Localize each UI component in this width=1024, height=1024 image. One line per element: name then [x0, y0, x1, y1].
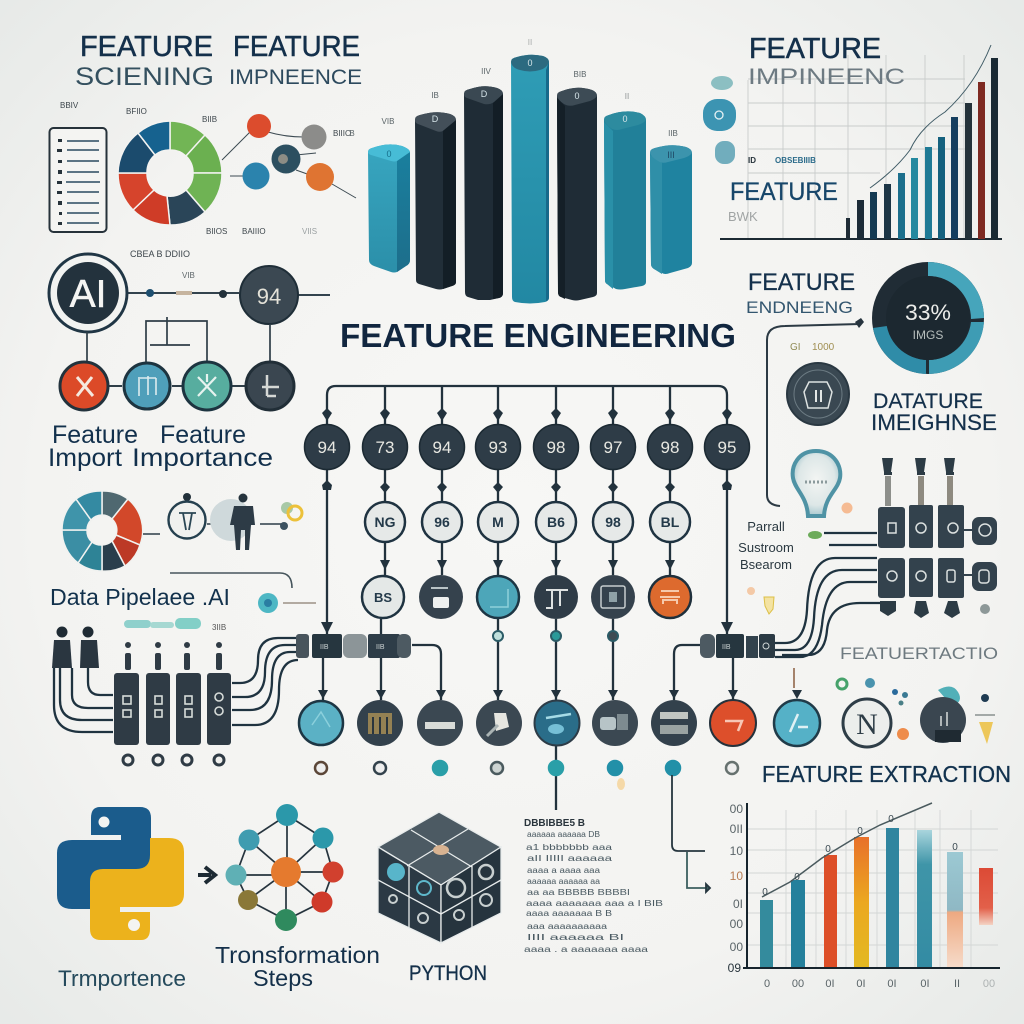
icon: checklist — [50, 128, 106, 232]
heading: top right: BWK — [728, 209, 758, 224]
small chart captions: top left: BFIIO — [126, 107, 147, 116]
label: feature importance: Importance — [132, 444, 273, 472]
bar chart: feature extraction: 10 — [730, 844, 743, 858]
flow tree: bottom row icon nodes — [299, 700, 820, 746]
flow tree: first row number nodes: 98 — [547, 438, 565, 457]
bar 3 — [464, 86, 503, 300]
flow tree: second row nodes: 98 — [605, 514, 621, 530]
label: parallel system: Sustroom — [738, 540, 794, 555]
label: datature imeighnse: IMEIGHNSE — [871, 410, 997, 435]
bar value labels: B — [349, 129, 355, 138]
text block: code listing: aaa aaaaaaaaaa — [527, 922, 608, 931]
heading: top right: OBSEBIIIB — [775, 156, 816, 165]
flow tree: arrow markers — [318, 408, 802, 699]
label: feature engineering right: ENDNEENG — [746, 298, 853, 317]
flow tree: third row icon nodes: BS — [374, 590, 392, 605]
3D bar chart: central — [349, 38, 692, 304]
label: feature importance: Feature — [52, 421, 138, 449]
heading: top left: IMPNEENCE — [229, 66, 362, 89]
text block: code listing: a1 bbbbbbb aaa — [526, 843, 613, 852]
flow tree: second row nodes: NG — [374, 514, 396, 530]
gauge: percentage: IMGS — [913, 328, 943, 342]
AI node group: left: 94 — [257, 284, 281, 309]
text block: code listing: DBBIBBE5 B — [524, 818, 585, 829]
bar chart: feature extraction: 0I — [920, 978, 930, 990]
flow tree: second row nodes: 96 — [434, 514, 450, 530]
connector: left — [296, 634, 411, 658]
connector line to bulb: GI — [790, 342, 801, 353]
flow tree: first row number nodes: 95 — [718, 438, 736, 457]
gauge: percentage — [872, 262, 984, 374]
icons: feature extraction: N — [856, 708, 878, 741]
bar chart: feature extraction: 00 — [730, 940, 743, 954]
heading: top right: IMPINEENC — [748, 64, 905, 89]
bar chart: feature extraction: 0 — [952, 842, 958, 853]
gauge: percentage: 33% — [905, 300, 951, 325]
donut chart: pipeline — [62, 491, 143, 571]
bar 6 — [604, 111, 646, 290]
python logo — [57, 807, 184, 940]
small chart captions: top left: BAIIIO — [242, 227, 266, 236]
bar chart: feature extraction: 0 — [857, 826, 863, 837]
flow tree: bottom small markers — [315, 761, 738, 775]
bar 4 — [511, 55, 549, 303]
bar chart: feature extraction: 09 — [728, 961, 741, 975]
connector: left: IIB — [376, 644, 385, 651]
flow tree: bus lines — [323, 386, 733, 810]
text block: code listing: aII IIIII aaaaaa — [527, 854, 613, 863]
bar chart: feature extraction: 0I — [856, 978, 866, 990]
connector line to bulb — [767, 318, 864, 506]
text block: code listing: aaaa aaaaaaa B B — [526, 909, 612, 918]
label: transformation steps — [215, 942, 380, 991]
AI node group: left — [49, 249, 330, 410]
bar cap glyphs: 0 — [622, 114, 628, 124]
heading: top left: FEATURE — [80, 31, 213, 63]
label: python: PYTHON — [409, 962, 487, 985]
AI node group: left: AI — [70, 273, 106, 316]
bar chart: feature extraction: 0I — [825, 978, 835, 990]
bar cap glyphs: 0 — [386, 149, 392, 159]
flow tree: second row nodes: B6 — [547, 514, 565, 530]
label: transformation steps: Steps — [253, 965, 313, 991]
bar 5 — [557, 88, 597, 301]
label: feature importance — [48, 421, 273, 472]
label: data pipeline: Data Pipelaee .AI — [50, 584, 230, 610]
arrow — [198, 867, 215, 883]
bar chart: feature extraction: 10 — [730, 869, 743, 883]
heading: top right: FEATURE — [749, 33, 881, 65]
label: parallel system — [738, 519, 794, 572]
icons: person and data node — [143, 493, 302, 550]
elbow connector to bottom chart — [617, 775, 710, 892]
flow tree: first row number nodes: 98 — [661, 438, 679, 457]
text block: code listing: aa aa BBBBB BBBBI — [527, 888, 630, 897]
bar chart: feature extraction: 0II — [730, 822, 743, 836]
flow tree: first row number nodes — [304, 424, 750, 470]
icon: light bulb — [793, 451, 852, 516]
bar chart: feature extraction: 0 — [888, 814, 894, 825]
bar chart: feature extraction: 00 — [983, 978, 995, 990]
bar chart: feature extraction: 00 — [730, 802, 743, 816]
pipe accent and teal marker: 3IIB — [212, 623, 226, 632]
flow tree: first row number nodes: 97 — [604, 438, 622, 457]
text block: code listing: IIII aaaaaa BI — [527, 933, 624, 942]
pipe accent and teal marker — [124, 573, 316, 632]
flow tree: second row nodes: BL — [661, 514, 680, 530]
small chart captions: top left: VIIS — [302, 227, 317, 236]
text block: code listing: aaaaaa aaaaaa aa — [527, 877, 601, 886]
bar chart: feature extraction — [728, 802, 1000, 990]
bar chart: feature extraction: 00 — [730, 917, 743, 931]
AI node group: left: CBEA B DDIIO — [130, 249, 190, 259]
icon: dark circle — [787, 363, 849, 425]
switch bank: right — [747, 458, 997, 657]
small chart captions: top left: BIIB — [202, 115, 217, 124]
bar cap glyphs: 0 — [574, 91, 580, 101]
text block: code listing — [524, 818, 663, 954]
connector: left: IIB — [320, 644, 329, 651]
bar chart: feature extraction: 00 — [792, 978, 804, 990]
AI node group: left: VIB — [182, 271, 195, 280]
label: feature importance: Import — [48, 444, 122, 472]
bar chart: feature extraction: 0 — [825, 844, 831, 855]
flow tree: first row number nodes: 94 — [318, 438, 336, 457]
icon: teal blobs top right — [703, 76, 736, 164]
bar 2 — [415, 112, 456, 289]
label: feature engineering right: FEATURE — [748, 269, 855, 296]
bar cap glyphs: III — [667, 150, 675, 160]
heading: top right: FEATURE — [730, 178, 838, 206]
heading: top left — [75, 31, 362, 91]
label: datature imeighnse: DATATURE — [873, 390, 983, 413]
heading: top left: FEATURE — [233, 31, 360, 63]
small chart captions: top left: BIIIO — [333, 129, 351, 138]
label: feature extraction small: FEATUERTACTIO — [840, 644, 998, 663]
bar value labels: IIV — [481, 67, 492, 76]
isometric cube — [378, 812, 501, 943]
small chart captions: top left: BBIV — [60, 101, 79, 110]
bar chart: feature extraction: 0I — [733, 897, 743, 911]
text block: code listing: aaaa . a aaaaaaa aaaa — [524, 945, 649, 954]
title: FEATURE ENGINEERING — [340, 317, 736, 354]
bar value labels: IIB — [668, 129, 678, 138]
heading: top left: SCIENING — [75, 63, 214, 91]
bar cap glyphs: D — [432, 114, 439, 124]
bar cap glyphs: D — [481, 89, 488, 99]
flow tree: first row number nodes: 73 — [376, 438, 394, 457]
label: parallel system: Bsearom — [740, 557, 792, 572]
flow tree: small nodes below third row — [493, 631, 618, 641]
connector: right — [700, 634, 775, 658]
data pipeline: people and switch blocks — [52, 626, 298, 765]
flow tree: first row number nodes: 93 — [489, 438, 507, 457]
bar cap glyphs: 0 — [527, 58, 533, 68]
bar chart: feature extraction: II — [954, 978, 960, 990]
bar 1 — [368, 144, 410, 272]
label: parallel system: Parrall — [747, 519, 785, 534]
flow tree: first row number nodes: 94 — [433, 438, 451, 457]
text block: code listing: aaaa a aaaa aaa — [527, 866, 601, 875]
bar value labels: BIB — [574, 70, 586, 79]
line and bar chart: top right — [720, 45, 1002, 239]
bar chart: feature extraction: 0 — [762, 887, 768, 898]
connector: right: IIB — [722, 644, 731, 651]
donut chart: feature shares — [118, 121, 222, 225]
label: transformation steps: Tronsformation — [215, 942, 380, 968]
small chart captions: top left — [60, 101, 351, 236]
bar chart: feature extraction: 0 — [794, 872, 800, 883]
bar value labels: VIB — [382, 117, 394, 126]
bar cap glyphs — [386, 58, 675, 160]
heading: top right: ID — [748, 156, 756, 165]
network of feature nodes — [222, 114, 356, 198]
label: feature extraction: FEATURE EXTRACTION — [762, 761, 1011, 787]
flow tree: second row nodes: M — [492, 514, 504, 530]
connector line to bulb: 1000 — [812, 342, 835, 353]
label: importance: Trmportence — [58, 966, 186, 991]
label: feature engineering right — [746, 269, 855, 317]
flow tree: third row icon nodes — [362, 575, 691, 619]
text block: code listing: aaaa aaaaaaa aaa a I BIB — [526, 899, 663, 908]
heading: top right — [728, 33, 905, 224]
text block: code listing: aaaaaa aaaaaa DB — [527, 830, 600, 839]
label: feature importance: Feature — [160, 421, 246, 449]
flow tree: second row nodes — [365, 502, 690, 542]
bar value labels: II — [625, 92, 629, 101]
icons: feature extraction — [794, 668, 995, 747]
bar value labels — [349, 38, 678, 138]
label: datature imeighnse — [871, 390, 997, 435]
bar value labels: II — [528, 38, 532, 47]
molecule network — [226, 804, 344, 931]
bar 7 — [650, 145, 692, 274]
small chart captions: top left: BIIOS — [206, 227, 227, 236]
bar chart: feature extraction: 0 — [764, 978, 770, 990]
bar value labels: IB — [431, 91, 439, 100]
bar chart: feature extraction: 0I — [887, 978, 897, 990]
